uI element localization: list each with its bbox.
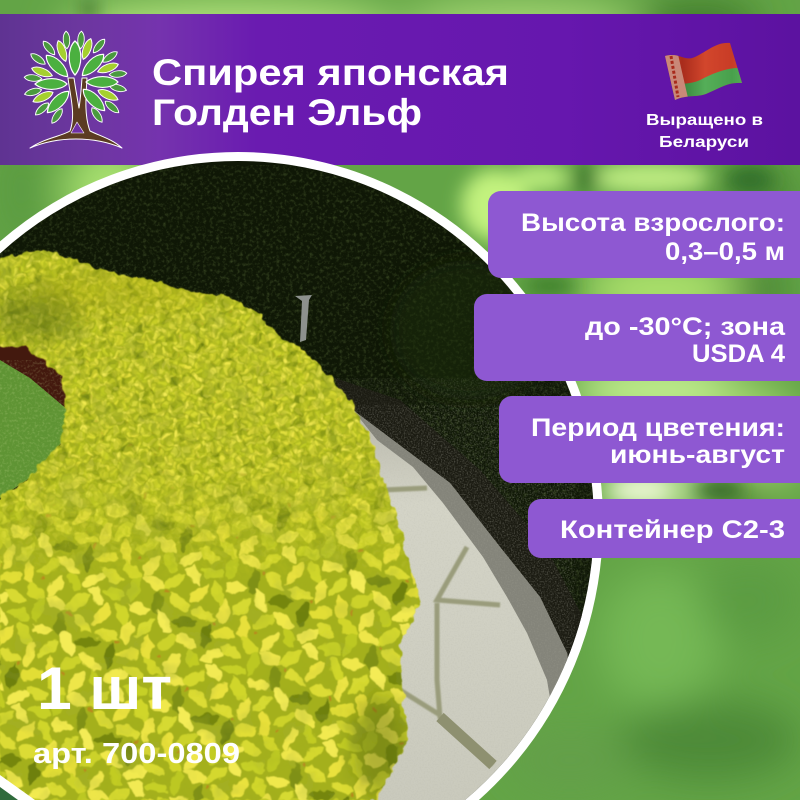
icon: Belarus flag (665, 42, 742, 100)
title: Спирея японская (152, 52, 509, 93)
panel: frost hardiness (474, 294, 800, 381)
shrub: golden spirea hedge (0, 240, 430, 800)
dark hedge (0, 160, 610, 800)
photo: circular garden photo with white ring (0, 152, 610, 800)
white ring overlapping header (142, 152, 334, 165)
logo: tree (24, 31, 127, 148)
panel: container (528, 499, 800, 558)
header banner (0, 14, 800, 165)
panel: frost hardiness: USDA 4 (692, 340, 785, 368)
panel: flowering period: Период цветения: (531, 414, 785, 442)
logo central leaves (35, 41, 118, 116)
title: Голден Эльф (152, 92, 422, 133)
shadow on curb edge (353, 410, 575, 710)
panel: frost hardiness: до -30°C; зона (585, 313, 786, 341)
logo light leaves (30, 37, 120, 105)
garden lamp (295, 295, 312, 342)
panel: flowering period: июнь-август (610, 441, 785, 469)
text: grown in Belarus: Беларуси (659, 134, 749, 151)
panel: flowering period (499, 396, 800, 483)
white ring: lower-left corner (0, 775, 35, 800)
panel: height: Высота взрослого: (521, 209, 785, 237)
panel: container: Контейнер С2-3 (560, 516, 785, 544)
text: grown in Belarus: Выращено в (646, 112, 763, 129)
logo dark outer leaves (24, 31, 127, 125)
panel: height (488, 191, 800, 278)
logo ground and trunk (30, 78, 122, 148)
text: article number: арт. 700-0809 (33, 738, 240, 770)
dark mulch beside path (335, 378, 595, 670)
lawn (0, 345, 67, 498)
title (152, 52, 509, 133)
panel: height: 0,3–0,5 м (665, 238, 785, 266)
stone path (335, 405, 575, 800)
cracks between stones (383, 488, 500, 765)
white ring (0, 152, 603, 800)
text: quantity: 1 шт (37, 655, 172, 722)
text: grown in Belarus (646, 112, 763, 151)
